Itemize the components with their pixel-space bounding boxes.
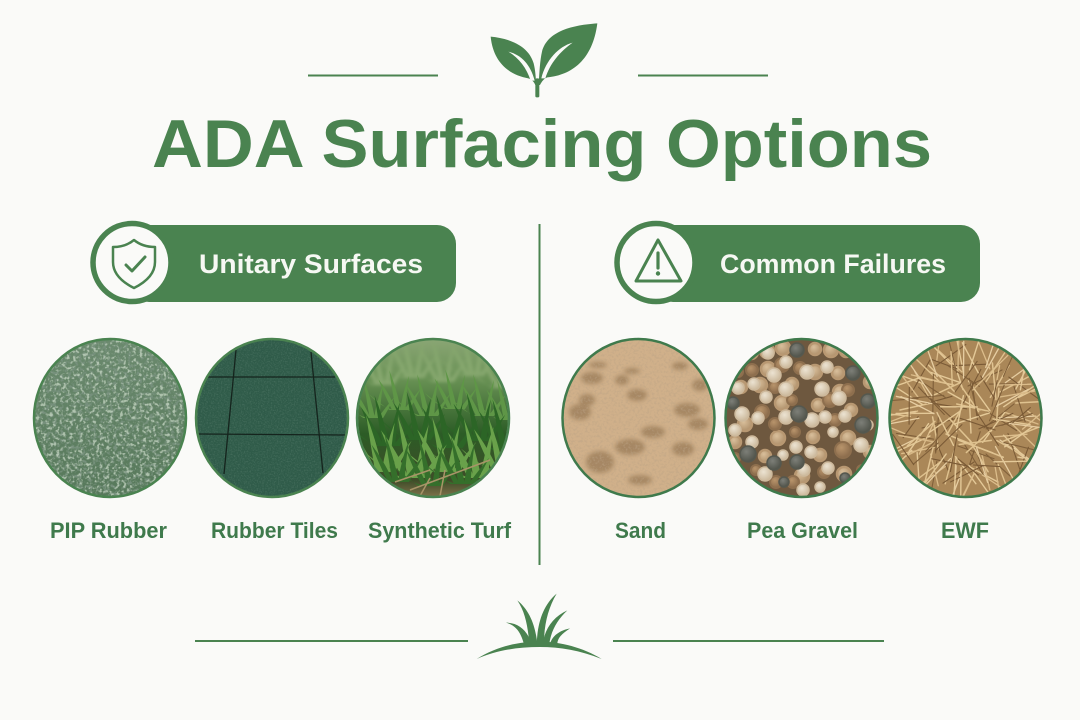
bottom divider right (613, 640, 884, 642)
label: PIP Rubber: PIP Rubber (50, 518, 167, 543)
panel: unitary surfaces (30, 224, 533, 543)
label: Pea Gravel: Pea Gravel (747, 518, 858, 543)
swatch: PIP rubber (30, 335, 190, 500)
title: ADA Surfacing Options (152, 106, 932, 182)
label: Synthetic Turf: Synthetic Turf (368, 518, 512, 543)
swatch: rubber tiles (190, 335, 355, 500)
center vertical divider (538, 224, 540, 565)
label: EWF: EWF (941, 518, 989, 543)
panel: common failures (558, 224, 1070, 543)
swatch: pea gravel (722, 335, 882, 500)
heading pill: common failures: Common Failures (720, 249, 946, 279)
swatch: sand (558, 335, 720, 500)
label: Sand: Sand (615, 518, 666, 543)
heading pill: common failures (654, 225, 980, 302)
top divider right (638, 74, 768, 76)
swatch: engineered wood fiber (888, 338, 1043, 498)
swatch: synthetic turf (356, 338, 510, 498)
label: Rubber Tiles: Rubber Tiles (211, 518, 338, 543)
icon: grass tuft (477, 594, 602, 659)
icon: sprouting leaves (491, 23, 597, 97)
heading pill: unitary surfaces (130, 225, 456, 302)
heading pill: unitary surfaces: Unitary Surfaces (199, 249, 423, 279)
icon: shield with check (93, 224, 171, 302)
bottom divider left (195, 640, 468, 642)
icon: warning triangle (617, 224, 695, 302)
top divider left (308, 74, 438, 76)
